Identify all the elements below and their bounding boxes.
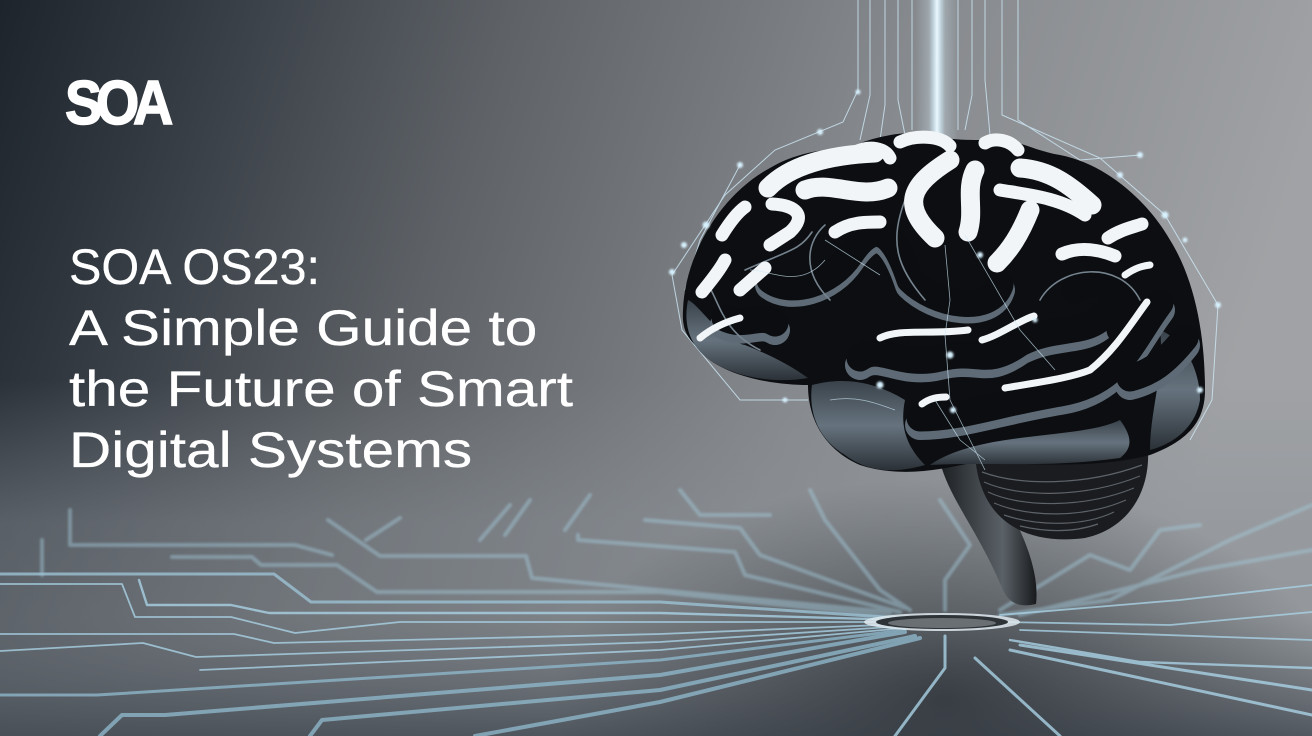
circuit lines on floor xyxy=(0,490,1312,736)
logo: SOA xyxy=(65,69,167,138)
title: the Future of Smart xyxy=(69,361,573,417)
far blurred traces xyxy=(42,490,1312,618)
scanner platform xyxy=(864,613,1020,631)
dark gyri with rims xyxy=(705,200,1185,425)
vertical light beam xyxy=(915,0,959,140)
cerebrum body xyxy=(683,133,1205,472)
brain stem xyxy=(940,462,1037,605)
title xyxy=(68,239,573,478)
thin wires over brain xyxy=(750,235,1055,470)
near sharp traces xyxy=(0,574,1312,736)
title: Digital Systems xyxy=(69,422,472,478)
glowing nodes xyxy=(669,90,1221,413)
title: A Simple Guide to xyxy=(69,300,537,356)
neural wires around brain xyxy=(672,0,1218,440)
brain illustration xyxy=(669,90,1221,605)
white glossy highlights xyxy=(700,137,1150,404)
grey shells xyxy=(686,300,1200,470)
title: SOA OS23: xyxy=(69,239,320,295)
cerebellum xyxy=(975,450,1148,539)
